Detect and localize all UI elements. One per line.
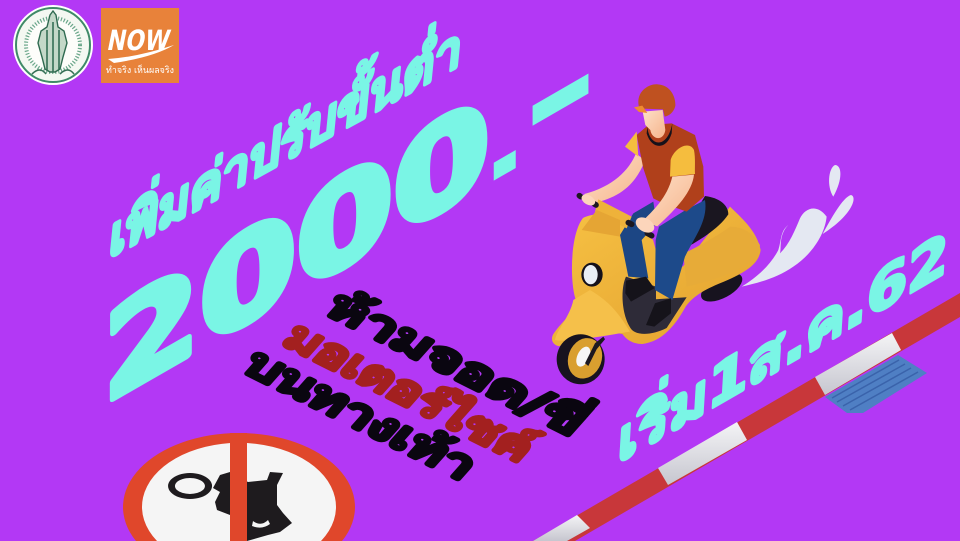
- helmet: [638, 84, 675, 117]
- neck and face: [643, 110, 665, 138]
- logo: NOW: ทำจริง เห็นผลจริง: [106, 63, 174, 76]
- logo: NOW: NOW: [105, 24, 173, 57]
- near shoe: [646, 298, 671, 327]
- warning: no parking or riding: มอเตอร์ไซค์: [273, 313, 546, 471]
- warning: no parking or riding: [233, 278, 602, 489]
- rear wheel: [697, 267, 747, 307]
- amount: 2000 baht: .: [481, 73, 528, 211]
- seat: [680, 196, 728, 251]
- drain grate: [825, 355, 927, 413]
- start date: เริ่ม1ส.ค.62: [616, 211, 951, 477]
- warning: no parking or riding: ห้ามจอด/ขี่: [315, 278, 602, 445]
- near sleeve: [670, 146, 695, 177]
- far shoe: [625, 277, 654, 302]
- far arm: [584, 153, 645, 204]
- amount: 2000 baht: [103, 0, 597, 433]
- torso: [637, 123, 704, 212]
- motorcycle silhouette: [168, 472, 292, 541]
- logo: NOW: [101, 8, 179, 83]
- no motorcycle sign: [123, 433, 355, 541]
- road curb: [533, 293, 960, 541]
- floor: [623, 277, 687, 334]
- headlight: [581, 263, 603, 287]
- front wheel: [557, 334, 605, 384]
- amount: 2000 baht: 2000: [103, 68, 490, 433]
- warning: no parking or riding: บนทางเท้า: [233, 341, 488, 489]
- scooter body: [552, 207, 761, 346]
- logo: city seal: [13, 5, 93, 85]
- handlebar: [595, 199, 632, 228]
- far leg: [620, 202, 657, 278]
- near arm: [642, 175, 694, 226]
- splash: [742, 165, 854, 287]
- scooter rider illustration: [552, 84, 854, 384]
- collar: [647, 123, 672, 146]
- near leg: [655, 200, 706, 300]
